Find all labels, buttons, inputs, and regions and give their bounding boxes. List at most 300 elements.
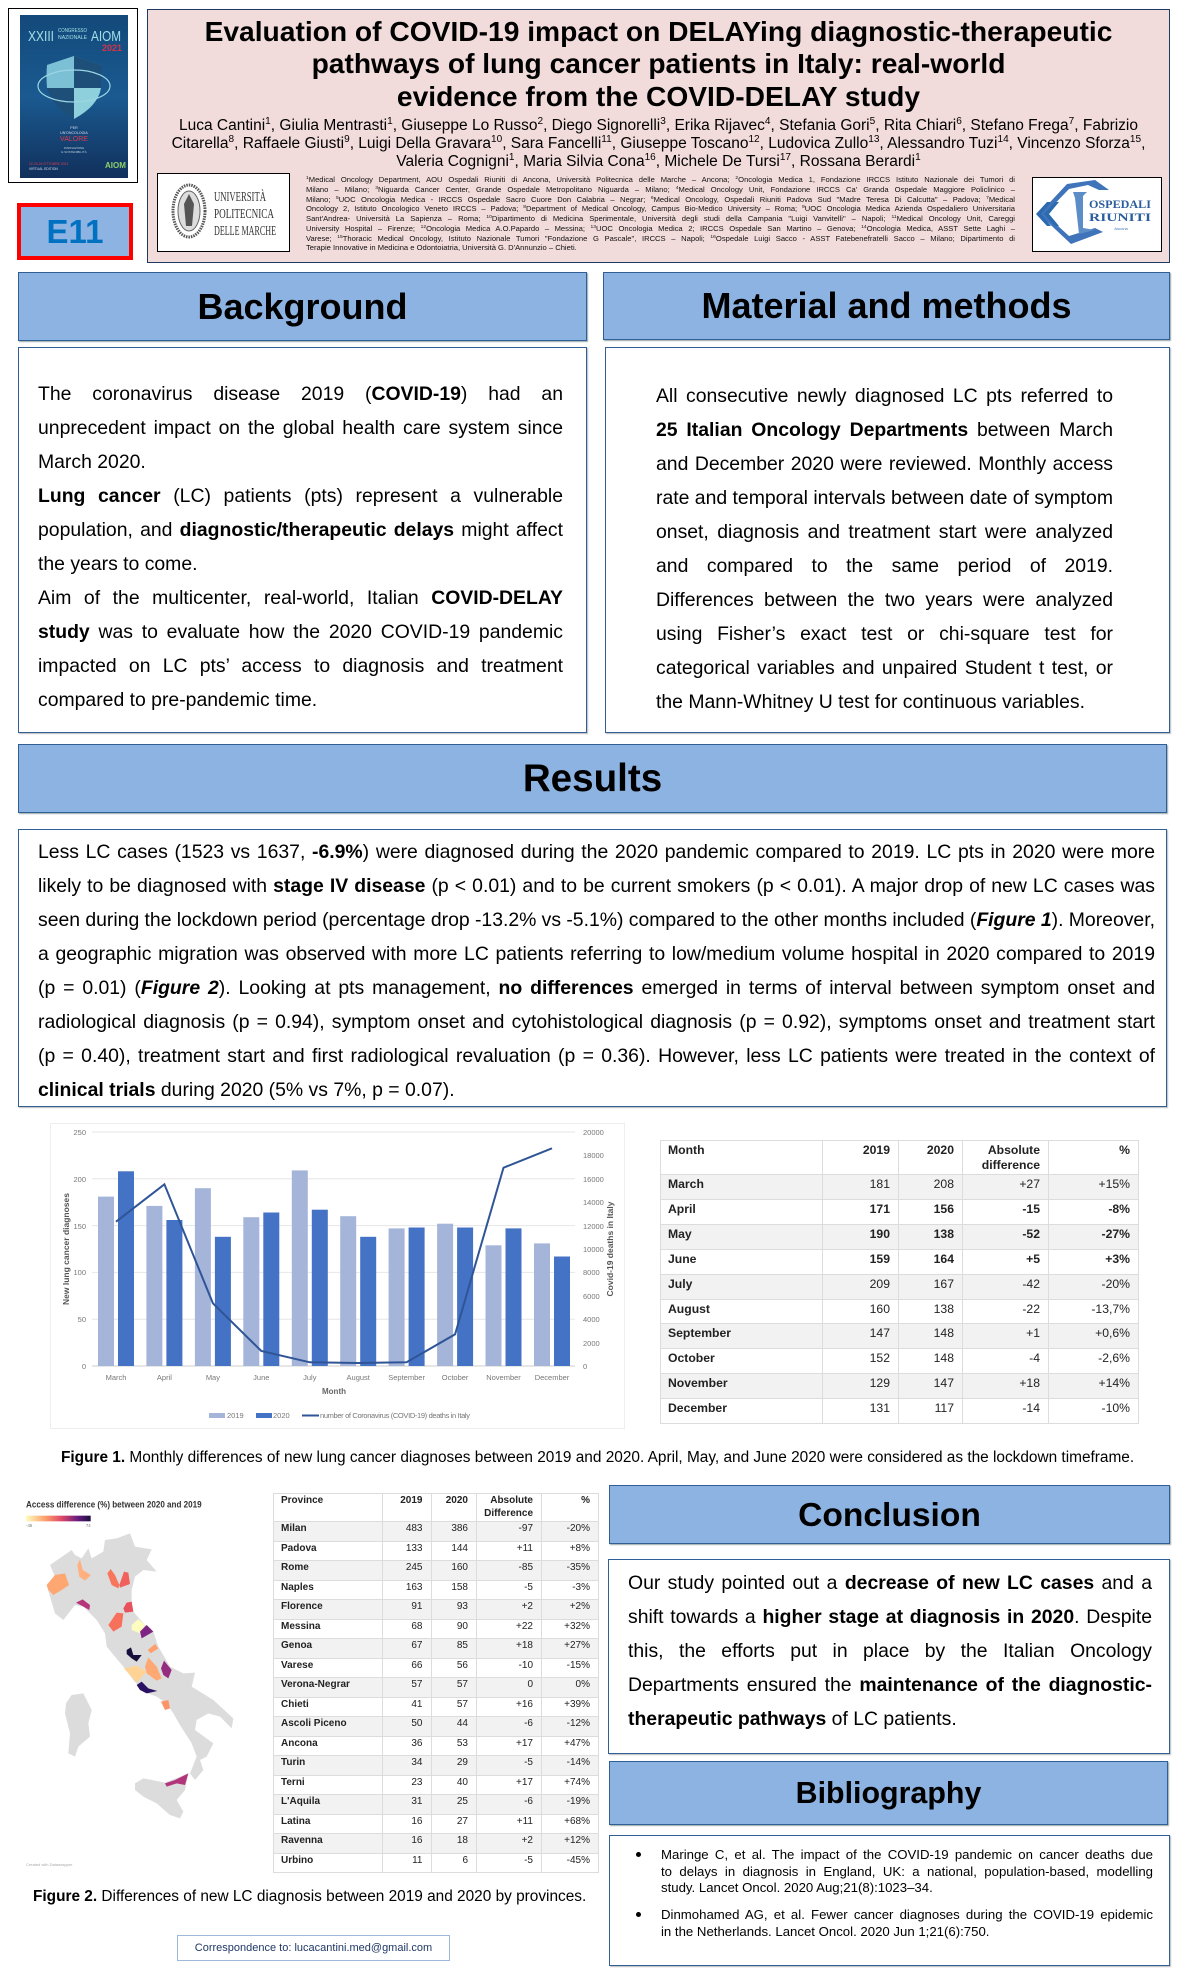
- chart: monthly diagnoses and deaths: [50, 1123, 625, 1429]
- table: monthly differences: 148: [934, 1351, 954, 1365]
- table: province differences: -5: [524, 1854, 533, 1866]
- table: monthly differences: 2020: [927, 1143, 954, 1157]
- table: monthly differences: 156: [934, 1202, 954, 1216]
- congress cover image: VIRTUAL EDITION: [29, 167, 58, 171]
- table: province differences: 2019: [400, 1495, 422, 1506]
- congress cover image: UN'ONCOLOGIA: [60, 131, 88, 135]
- table: province differences: Genoa: [281, 1640, 312, 1651]
- table: province differences: 27: [457, 1816, 468, 1826]
- table: province differences: 31: [411, 1796, 422, 1807]
- table: monthly differences: 2019: [863, 1143, 890, 1157]
- table: province differences: 25: [457, 1796, 468, 1807]
- table: province differences: 0: [527, 1679, 533, 1690]
- congress cover image: VALORE: [60, 136, 88, 143]
- table: monthly differences: 160: [870, 1302, 890, 1316]
- table: province differences: 16: [411, 1816, 422, 1826]
- italy base map: [47, 1533, 233, 1818]
- left axis labels: 200: [73, 1175, 86, 1184]
- table: province differences: +8%: [570, 1542, 590, 1554]
- table: province differences: 40: [457, 1776, 468, 1788]
- reference 1: [661, 1847, 1153, 1895]
- right axis labels: 10000: [583, 1245, 604, 1254]
- authors: [172, 116, 1145, 170]
- table: monthly differences: April: [668, 1202, 696, 1216]
- table: monthly differences: Absolute: [988, 1143, 1040, 1157]
- reference 1: Maringe C, et al. The impact of the COVID-19 pandemic on cancer deaths due: [661, 1847, 1153, 1862]
- title: evidence from the COVID-DELAY study: [397, 80, 920, 112]
- table: province differences: Terni: [281, 1776, 305, 1788]
- right axis labels: 4000: [583, 1315, 600, 1324]
- month labels: November: [486, 1373, 521, 1382]
- poster code badge E11: E11: [47, 212, 103, 250]
- table: monthly differences: 208: [934, 1177, 954, 1191]
- table: monthly differences: -15: [1022, 1202, 1040, 1216]
- table: province differences: +18: [516, 1640, 533, 1651]
- table: province differences: 2020: [446, 1495, 468, 1506]
- table: province differences: +11: [517, 1816, 533, 1826]
- correspondence box: Correspondence to: lucacantini.med@gmail.com: [195, 1942, 432, 1954]
- table: monthly differences: +15%: [1098, 1177, 1130, 1191]
- methods paragraph: rate and temporal intervals between date of symptom: [656, 487, 1113, 509]
- table: monthly differences: +14%: [1098, 1376, 1130, 1390]
- table: province differences: Turin: [281, 1757, 305, 1768]
- heading: Bibliography: Bibliography: [796, 1776, 981, 1810]
- table: province differences: +32%: [564, 1620, 590, 1632]
- table: monthly differences: 131: [870, 1400, 890, 1414]
- right axis labels: 20000: [583, 1128, 604, 1137]
- left axis labels: 100: [73, 1268, 86, 1277]
- affiliations: Terapie Innovative in Medicina e Odontoiatria, Università G. D'Annunzio – Chieti.: [306, 243, 577, 252]
- table: monthly differences: %: [1119, 1143, 1130, 1157]
- table: province differences: +2%: [570, 1601, 590, 1612]
- conclusion paragraph: this, the efforts put in place by the Italian Oncology: [628, 1640, 1152, 1662]
- affiliations: University Hospital – Firenze; 12Oncologia Medica A.O.Papardo – Messina; 13UOC Oncologia Medica 2; IRCCS Ospedale San Martino – Genova; 14Oncologia Medica, ASST Sette Laghi –: [306, 224, 1015, 233]
- table: monthly differences: July: [668, 1277, 692, 1291]
- bars 2019: [98, 1170, 550, 1366]
- map credit: Created with Datawrapper: [26, 1862, 73, 1867]
- background paragraph: The coronavirus disease 2019 (COVID-19) had an: [38, 383, 563, 405]
- table: province differences: -10: [519, 1660, 533, 1670]
- legend: [209, 1411, 470, 1420]
- highlighted provinces: [47, 1559, 188, 1787]
- reference 2: [661, 1907, 1153, 1938]
- methods paragraph: using Fisher’s exact test or chi-square test for: [656, 623, 1113, 645]
- map legend: -45: [26, 1523, 33, 1528]
- table: province differences: -20%: [567, 1523, 590, 1534]
- table: province differences: 44: [457, 1718, 468, 1729]
- table: province differences: 16: [411, 1835, 422, 1846]
- congress cover image: PER: [70, 126, 78, 130]
- table: monthly differences: 171: [870, 1202, 890, 1216]
- map title: Access difference (%) between 2020 and 2019: [26, 1500, 202, 1510]
- table: monthly differences: October: [668, 1351, 715, 1365]
- congress cover image: CONGRESSO: [58, 28, 87, 34]
- table: province differences: +2: [522, 1835, 533, 1846]
- table: monthly differences: +27: [1019, 1177, 1040, 1191]
- results paragraph: seen during the lockdown period (percentage drop -13.2% vs -5.1%) compared to the other months included (Figure 1). Moreover,: [38, 909, 1155, 931]
- reference 1: study. Lancet Oncol. 2020 Aug;21(8):1023–34.: [661, 1880, 933, 1895]
- table: province differences: +22: [516, 1620, 533, 1632]
- left axis labels: 50: [78, 1315, 86, 1324]
- results paragraph: clinical trials during 2020 (5% vs 7%, p = 0.07).: [38, 1079, 455, 1101]
- logo: Ospedali Riuniti: RIUNITI: [1089, 210, 1151, 224]
- title: [205, 15, 1112, 112]
- panel: results text: [18, 829, 1167, 1107]
- table: monthly differences: 138: [934, 1227, 954, 1241]
- background paragraph: population, and diagnostic/therapeutic delays might affect: [38, 519, 563, 541]
- table: province differences: Padova: [281, 1542, 317, 1554]
- table: monthly differences: May: [668, 1227, 692, 1241]
- panel: header: [147, 9, 1170, 263]
- month labels: May: [206, 1373, 220, 1382]
- logo: Ospedali Riuniti: Ancona: [1114, 226, 1129, 231]
- table: province differences: 163: [406, 1582, 422, 1592]
- table: monthly differences: -22: [1022, 1302, 1040, 1316]
- table: province differences: 144: [451, 1542, 468, 1554]
- heading: Conclusion: Conclusion: [798, 1496, 981, 1534]
- table: monthly differences: 181: [870, 1177, 890, 1191]
- results paragraph: a geographic migration was observed with more LC patients referring to low/medium volume hospital in 2020 compared to 2019: [38, 943, 1155, 965]
- table: province differences: 56: [457, 1660, 468, 1670]
- table: province differences: -45%: [567, 1854, 590, 1866]
- month labels: April: [157, 1373, 172, 1382]
- background paragraph: [38, 383, 563, 711]
- table: monthly differences: -14: [1022, 1400, 1040, 1414]
- methods paragraph: onset, diagnosis and treatment start were analyzed: [656, 521, 1113, 543]
- table: province differences: 90: [457, 1620, 468, 1632]
- logo: Ospedali Riuniti: [1032, 177, 1162, 252]
- table: province differences: 23: [411, 1776, 422, 1788]
- table: province differences: -19%: [567, 1796, 590, 1807]
- correspondence box: [177, 1935, 450, 1961]
- table: monthly differences: 148: [934, 1326, 954, 1340]
- table: province differences: 57: [457, 1698, 468, 1710]
- table: province differences: Rome: [281, 1562, 309, 1573]
- table: province differences: 66: [411, 1660, 422, 1670]
- results paragraph: [38, 841, 1156, 1101]
- congress cover image: XXIII: [28, 28, 54, 45]
- table: monthly differences: +3%: [1105, 1252, 1130, 1266]
- table: province differences: %: [581, 1495, 590, 1506]
- methods paragraph: the Mann-Whitney U test for continuous variables.: [656, 691, 1085, 713]
- table: province differences: Messina: [281, 1620, 320, 1632]
- table: province differences: +68%: [564, 1816, 590, 1826]
- table: province differences: L'Aquila: [281, 1796, 320, 1807]
- table: province differences: 18: [457, 1835, 468, 1846]
- table: province differences: Ascoli Piceno: [281, 1718, 347, 1729]
- table: province differences: 91: [411, 1601, 422, 1612]
- left axis title: New lung cancer diagnoses: [61, 1193, 71, 1305]
- table: province differences: Milan: [281, 1523, 307, 1534]
- heading: Results: Results: [523, 757, 662, 800]
- conclusion paragraph: Our study pointed out a decrease of new LC cases and a: [628, 1572, 1152, 1594]
- table: monthly differences: 190: [870, 1227, 890, 1241]
- table: province differences: -5: [524, 1757, 533, 1768]
- table: province differences: Verona-Negrar: [281, 1679, 350, 1690]
- table: monthly differences: -42: [1022, 1277, 1040, 1291]
- table: monthly differences: 167: [934, 1277, 954, 1291]
- congress cover image: INNOVAZIONE: [64, 146, 84, 150]
- table: province differences: 6: [462, 1854, 468, 1866]
- table: province differences: Varese: [281, 1660, 313, 1670]
- background paragraph: March 2020.: [38, 451, 146, 473]
- congress cover image: NAZIONALE: [58, 35, 88, 41]
- table: province differences: Ravenna: [281, 1835, 323, 1846]
- table: province differences: 34: [411, 1757, 422, 1768]
- table: province differences: +74%: [564, 1776, 590, 1788]
- table: monthly differences: -4: [1029, 1351, 1040, 1365]
- table: monthly differences: August: [668, 1302, 710, 1316]
- table: monthly differences: 147: [870, 1326, 890, 1340]
- affiliations: Varese; 15Thoracic Medical Oncology, Istituto Nazionale Tumori "Fondazione G Pascale", IRCCS – Napoli; 16Ospedale Luigi Sacco - ASST Fatebenefratelli Sacco – Milano; Dipartimento di: [306, 234, 1015, 242]
- table: monthly differences: 117: [935, 1400, 954, 1414]
- table: province differences: Chieti: [281, 1698, 309, 1710]
- legend: number of Coronavirus (COVID-19) deaths in Italy: [320, 1411, 470, 1420]
- table: monthly differences: difference: [982, 1158, 1040, 1172]
- heading: Conclusion: [609, 1485, 1170, 1544]
- right axis labels: 8000: [583, 1268, 600, 1277]
- table: province differences: Latina: [281, 1816, 310, 1826]
- affiliations: 1Medical Oncology Department, AOU Ospedali Riuniti di Ancona, Università Politecnica delle Marche – Ancona; 2Oncologia Medica 1, Fondazione IRCCS Istituto Nazionale dei Tumori di: [306, 175, 1015, 184]
- logo: Università Politecnica delle Marche: [157, 173, 290, 252]
- table: province differences: +2: [522, 1601, 533, 1612]
- table: province differences: 53: [457, 1738, 468, 1748]
- table: province differences: 158: [451, 1582, 468, 1592]
- table: province differences: 245: [406, 1562, 422, 1573]
- affiliations: [306, 175, 1015, 252]
- heading: Results: [18, 744, 1167, 813]
- table: province differences: +39%: [564, 1698, 590, 1710]
- congress cover image: E SOSTENIBILITÀ: [61, 150, 87, 154]
- table: province differences: [273, 1493, 599, 1873]
- affiliations: Sant'Andrea- Università La Sapienza – Roma; 10Dipartimento di Medicina Sperimentale, Università degli studi della Campania "Luigi Vanvitelli" – Napoli; 11Medical Oncology Unit, Careggi: [306, 214, 1015, 223]
- table: monthly differences: 147: [934, 1376, 954, 1390]
- table: province differences: -85: [519, 1562, 533, 1573]
- table: province differences: 11: [412, 1854, 422, 1866]
- right axis labels: 2000: [583, 1339, 600, 1348]
- background paragraph: Lung cancer (LC) patients (pts) represent a vulnerable: [38, 485, 563, 507]
- left axis labels: 250: [73, 1128, 86, 1137]
- methods paragraph: and compared to the same period of 2019.: [656, 555, 1113, 577]
- right axis title: Covid-19 deaths in Italy: [605, 1201, 615, 1296]
- methods paragraph: 25 Italian Oncology Departments between March: [656, 419, 1113, 441]
- table: province differences: +27%: [564, 1640, 590, 1651]
- table: province differences: 160: [451, 1562, 468, 1573]
- table: monthly differences: 152: [870, 1351, 890, 1365]
- table: monthly differences: December: [668, 1400, 727, 1414]
- table: province differences: 36: [411, 1738, 422, 1748]
- table: province differences: Naples: [281, 1582, 314, 1592]
- results paragraph: radiological diagnosis (p = 0.94), symptom onset and cytohistological diagnosis (p = 0.92), symptoms onset and treatment start: [38, 1011, 1155, 1033]
- table: province differences: Difference: [484, 1508, 533, 1519]
- table: monthly differences: 138: [934, 1302, 954, 1316]
- reference 2: in the Netherlands. Lancet Oncol. 2020 Jun 1;21(6):750.: [661, 1924, 989, 1938]
- congress cover image: AIOM: [91, 28, 121, 45]
- right axis labels: 14000: [583, 1198, 604, 1207]
- right axis labels: [583, 1128, 604, 1371]
- month labels: October: [442, 1373, 469, 1382]
- left axis labels: 0: [82, 1362, 86, 1371]
- affiliations: Milano – Milano; 3Niguarda Cancer Center, Grande Ospedale Metropolitano Niguarda – Milano; 4Medical Oncology Unit, Fondazione IRCCS Ca' Granda Ospedale Maggiore Policlinico –: [306, 185, 1015, 194]
- table: province differences: 68: [411, 1620, 422, 1632]
- table: monthly differences: 209: [870, 1277, 890, 1291]
- reference 1: to delays in diagnosis in England, UK: a national, population-based, modelling: [661, 1864, 1153, 1878]
- heading: Material and methods: [603, 272, 1170, 340]
- table: province differences: 133: [406, 1542, 422, 1554]
- month labels: December: [535, 1373, 570, 1382]
- table: monthly differences: 164: [934, 1252, 954, 1266]
- congress cover image: [8, 8, 138, 183]
- authors: Valeria Cognigni1, Maria Silvia Cona16, Michele De Tursi17, Rossana Berardi1: [396, 152, 921, 170]
- results paragraph: (p = 0.01) (Figure 2). Looking at pts management, no differences emerged in terms of interval between symptom onset and: [38, 977, 1155, 999]
- methods paragraph: categorical variables and unpaired Student t test, or: [656, 657, 1113, 679]
- background paragraph: compared to pre-pandemic time.: [38, 689, 317, 711]
- left axis labels: [73, 1128, 86, 1371]
- table: monthly differences: 129: [870, 1376, 890, 1390]
- title: Evaluation of COVID-19 impact on DELAYing diagnostic-therapeutic: [205, 15, 1112, 47]
- month labels: March: [106, 1373, 126, 1382]
- congress cover image: 2021: [102, 43, 122, 53]
- month labels: [106, 1373, 570, 1382]
- map legend: 74: [86, 1523, 91, 1528]
- table: monthly differences: -13,7%: [1091, 1302, 1130, 1316]
- table: province differences: 50: [411, 1718, 422, 1729]
- table: province differences: -3%: [572, 1582, 590, 1592]
- table: province differences: 41: [411, 1698, 422, 1710]
- table: province differences: -15%: [567, 1660, 590, 1670]
- table: province differences: 0%: [576, 1679, 590, 1690]
- table: province differences: 57: [457, 1679, 468, 1690]
- table: province differences: 57: [411, 1679, 422, 1690]
- table: province differences: -12%: [567, 1718, 590, 1729]
- table: monthly differences: -20%: [1102, 1277, 1130, 1291]
- table: province differences: -6: [524, 1796, 533, 1807]
- month labels: August: [347, 1373, 371, 1382]
- table: monthly differences: -27%: [1102, 1227, 1130, 1241]
- table: monthly differences: +5: [1026, 1252, 1040, 1266]
- legend: 2019: [227, 1411, 244, 1420]
- background paragraph: impacted on LC pts’ access to diagnosis and treatment: [38, 655, 563, 677]
- results paragraph: Less LC cases (1523 vs 1637, -6.9%) were diagnosed during the 2020 pandemic compared to 2019. LC pts in 2020 were more: [38, 841, 1155, 863]
- table: province differences: 85: [457, 1640, 468, 1651]
- table: province differences: Urbino: [281, 1854, 313, 1866]
- legend: 2020: [273, 1411, 290, 1420]
- background paragraph: study was to evaluate how the 2020 COVID-19 pandemic: [38, 621, 563, 643]
- table: province differences: +47%: [564, 1738, 590, 1748]
- table: monthly differences: November: [668, 1376, 728, 1390]
- table: province differences: -14%: [567, 1757, 590, 1768]
- map: access difference by province: [26, 1500, 234, 1867]
- panel: bibliography: [609, 1835, 1170, 1966]
- right axis labels: 6000: [583, 1292, 600, 1301]
- conclusion paragraph: therapeutic pathways of LC patients.: [628, 1708, 957, 1730]
- table: province differences: Absolute: [490, 1495, 533, 1506]
- table: province differences: 386: [451, 1523, 468, 1534]
- table: province differences: Florence: [281, 1601, 323, 1612]
- right axis labels: 16000: [583, 1175, 604, 1184]
- logo: Ospedali Riuniti: OSPEDALI: [1089, 197, 1151, 211]
- table: province differences: +17: [516, 1776, 533, 1788]
- title: pathways of lung cancer patients in Italy: real-world: [312, 47, 1005, 79]
- heading: Material and methods: Material and methods: [701, 285, 1072, 326]
- table: province differences: 93: [457, 1601, 468, 1612]
- right axis labels: 12000: [583, 1222, 604, 1231]
- table: monthly differences: September: [668, 1326, 731, 1340]
- panel: background text: [18, 347, 587, 733]
- table: monthly differences: [660, 1140, 1139, 1424]
- month labels: June: [253, 1373, 269, 1382]
- reference 2: Dinmohamed AG, et al. Fewer cancer diagnoses during the COVID-19 epidemic: [661, 1907, 1153, 1922]
- map legend: [26, 1516, 91, 1528]
- authors: Luca Cantini1, Giulia Mentrasti1, Giuseppe Lo Russo2, Diego Signorelli3, Erika Rijavec4, Stefania Gori5, Rita Chiari6, Stefano Frega7, Fabrizio: [179, 116, 1138, 134]
- table: monthly differences: -2,6%: [1098, 1351, 1130, 1365]
- table: monthly differences: Month: [668, 1143, 705, 1157]
- background paragraph: the years to come.: [38, 553, 198, 575]
- table: monthly differences: 159: [870, 1252, 890, 1266]
- table: monthly differences: -10%: [1102, 1400, 1130, 1414]
- methods paragraph: [656, 385, 1113, 713]
- table: monthly differences: +0,6%: [1095, 1326, 1130, 1340]
- table: monthly differences: March: [668, 1177, 704, 1191]
- methods paragraph: All consecutive newly diagnosed LC pts referred to: [656, 385, 1113, 407]
- right axis labels: 18000: [583, 1151, 604, 1160]
- caption: figure 1: Figure 1. Monthly differences of new lung cancer diagnoses between 2019 and 2020. April, May, and June 2020 were considered as the lockdown timeframe.: [61, 1449, 1134, 1466]
- panel: methods text: [605, 347, 1170, 733]
- table: province differences: -6: [524, 1718, 533, 1729]
- congress cover image: 22-23-24 OTTOBRE 2021: [29, 162, 68, 166]
- background paragraph: Aim of the multicenter, real-world, Italian COVID-DELAY: [38, 587, 563, 609]
- bars 2020: [118, 1171, 570, 1366]
- heading: Background: Background: [197, 286, 408, 326]
- conclusion paragraph: shift towards a higher stage at diagnosis in 2020. Despite: [628, 1606, 1152, 1628]
- panel: conclusion text: [608, 1559, 1170, 1754]
- table: province differences: 483: [406, 1523, 422, 1534]
- background paragraph: unprecedent impact on the global health care system since: [38, 417, 563, 439]
- table: province differences: 67: [411, 1640, 422, 1651]
- affiliations: Milano; 5UOC Oncologia Medica - IRCCS Ospedale Sacro Cuore Don Calabria – Negrar; 6Medical Oncology, Ospedali Riuniti Padova Sud "Madre Teresa Di Calcutta" – Padova; 7Medical: [306, 194, 1015, 204]
- caption: figure 2: Figure 2. Differences of new LC diagnosis between 2019 and 2020 by provinces.: [33, 1888, 586, 1905]
- results paragraph: likely to be diagnosed with stage IV disease (p < 0.01) and to be current smokers (p < 0.01). A major drop of new LC cases was: [38, 875, 1155, 897]
- results paragraph: (p = 0.40), treatment start and first radiological revaluation (p = 0.36). However, less LC patients were treated in the context of: [38, 1045, 1155, 1067]
- methods paragraph: Differences between the two years were analyzed: [656, 589, 1113, 611]
- x axis title: Month: [322, 1387, 346, 1396]
- table: province differences: Province: [281, 1495, 323, 1506]
- table: province differences: +12%: [564, 1835, 590, 1846]
- authors: Citarella8, Raffaele Giusti9, Luigi Della Gravara10, Sara Fancelli11, Giuseppe Toscano12, Ludovica Zullo13, Alessandro Tuzi14, Vincenzo Sforza15,: [172, 134, 1145, 152]
- right axis labels: 0: [583, 1362, 587, 1371]
- congress cover image: AIOM: [105, 161, 126, 170]
- table: monthly differences: -8%: [1108, 1202, 1130, 1216]
- left axis labels: 150: [73, 1222, 86, 1231]
- conclusion paragraph: Departments ensured the maintenance of the diagnostic-: [628, 1674, 1152, 1696]
- poster code badge E11: [17, 203, 133, 260]
- heading: Bibliography: [609, 1761, 1168, 1825]
- month labels: September: [388, 1373, 425, 1382]
- table: monthly differences: +18: [1019, 1376, 1040, 1390]
- conclusion paragraph: [628, 1572, 1152, 1730]
- table: province differences: -5: [524, 1582, 533, 1592]
- table: province differences: Ancona: [281, 1738, 318, 1748]
- table: province differences: 29: [457, 1757, 468, 1768]
- month labels: July: [303, 1373, 317, 1382]
- table: monthly differences: +1: [1026, 1326, 1040, 1340]
- table: province differences: -35%: [567, 1562, 590, 1573]
- heading: Background: [18, 272, 587, 341]
- table: monthly differences: -52: [1022, 1227, 1040, 1241]
- affiliations: Oncology 2, Istituto Oncologico Veneto IRCCS – Padova; 8Department of Medical Oncology, Campus Bio-Medico University – Roma; 9UOC Oncologia Medica Azienda Ospedaliero Universitaria: [306, 204, 1015, 213]
- table: province differences: +11: [517, 1542, 533, 1554]
- bullet markers: [636, 1852, 641, 1917]
